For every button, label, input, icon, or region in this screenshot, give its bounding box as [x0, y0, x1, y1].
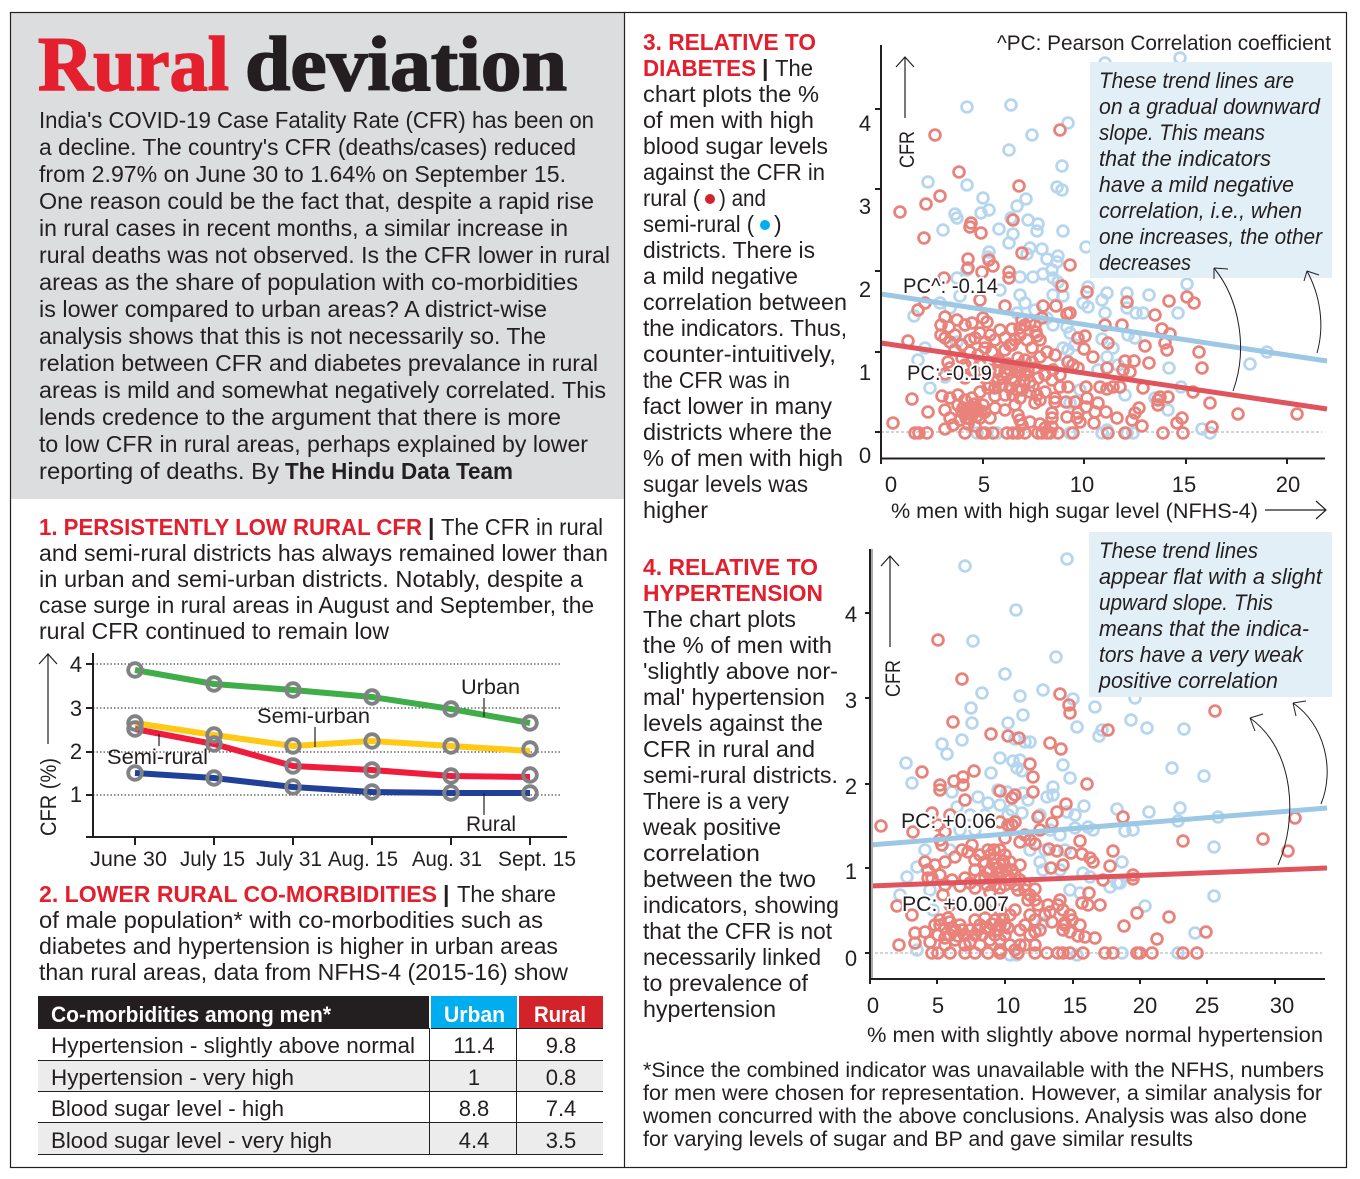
series: urban [135, 670, 530, 723]
y axis title with arrow [895, 57, 919, 168]
x axis tick labels: 15 [1172, 472, 1196, 497]
section 3 text: relative to diabetes [643, 29, 847, 523]
table: co-morbidities among men: 11.4 [453, 1033, 495, 1058]
section 2 text: lower rural co-morbidities [39, 881, 568, 985]
section 3 text: relative to diabetes: semi-rural ( [643, 211, 754, 237]
y axis tick labels: 4 [70, 652, 82, 677]
section 3 text: relative to diabetes: the CFR was in [643, 367, 790, 393]
x axis tick labels: 10 [996, 993, 1020, 1018]
correlation label: rural: PC: -0.19 [907, 361, 992, 385]
x axis labels: Aug. 31 [412, 847, 482, 871]
callout arrows [1250, 701, 1327, 865]
section 4 text: relative to hypertension: 'slightly above nor- [643, 658, 838, 684]
intro text block: areas is mild and somewhat negatively correlated. This [39, 377, 606, 403]
section 2 text: lower rural co-morbidities: of male population* with co-morbodities such as [39, 907, 543, 933]
data markers [128, 663, 537, 800]
section 2 text: lower rural co-morbidities: The share [457, 881, 556, 907]
x axis labels: July 15 [180, 847, 245, 871]
section 4 text: relative to hypertension: that the CFR is not [643, 918, 833, 944]
footnote: for men were chosen for representation. However, a similar analysis for [643, 1081, 1322, 1105]
intro text block: rural deaths was not observed. Is the CFR lower in rural [39, 242, 610, 268]
series labels with leaders: Urban [461, 675, 520, 699]
table: co-morbidities among men [38, 996, 603, 1154]
intro text block: India's COVID-19 Case Fatality Rate (CFR) has been on [39, 107, 594, 133]
section 4 text: relative to hypertension: correlation [643, 840, 760, 866]
y axis tick labels: 3 [70, 696, 82, 721]
series: rural [135, 773, 530, 793]
scatter chart: hypertension vs CFR [845, 532, 1332, 1047]
axes [875, 45, 1325, 464]
section 1 text: persistently low rural CFR: rural CFR continued to remain low [39, 618, 389, 644]
trend line: semi-rural [881, 294, 1327, 361]
scatter chart: diabetes vs CFR [859, 31, 1332, 523]
callout: flat slope [1089, 532, 1332, 697]
section 3 text: relative to diabetes: rural ( [643, 185, 700, 211]
y axis tick labels [70, 652, 82, 807]
y axis tick labels: 4 [845, 602, 857, 627]
y axis tick labels [845, 602, 857, 971]
x axis tick labels: 20 [1276, 472, 1300, 497]
x axis title: % men with slightly above normal hypertension [867, 1023, 1323, 1047]
section 4 text: relative to hypertension: to prevalence of [643, 970, 809, 996]
x axis tick labels: 0 [885, 472, 897, 497]
x axis tick labels [867, 993, 1294, 1018]
callout: downward slope [1090, 62, 1332, 278]
table: co-morbidities among men: Urban [444, 1002, 505, 1027]
footnote: Pearson correlation: ^PC: Pearson Correlation coefficient [997, 31, 1331, 55]
y axis title and arrow: CFR (%) [36, 758, 61, 836]
correlation label: semi-rural: PC: +0.06 [901, 809, 996, 833]
callout: downward slope: These trend lines are [1099, 68, 1294, 93]
callout: downward slope: correlation, i.e., when [1099, 198, 1302, 223]
table: co-morbidities among men: 3.5 [546, 1128, 576, 1153]
section 3 text: relative to diabetes: higher [643, 497, 708, 523]
section 4 text: relative to hypertension: 4. RELATIVE TO [643, 554, 818, 580]
table: co-morbidities among men: Blood sugar level - very high [51, 1128, 332, 1153]
section 1 text: persistently low rural CFR: The CFR in rural [441, 514, 603, 540]
intro text block: in rural cases in recent months, a similar increase in [39, 215, 568, 241]
section 3 text: relative to diabetes: fact lower in many [643, 393, 832, 419]
callout: flat slope: tors have a very weak [1099, 642, 1305, 667]
footnote: *Since the combined indicator was unavailable with the NFHS, numbers [643, 1058, 1324, 1082]
table: co-morbidities among men: 9.8 [546, 1033, 576, 1058]
section 3 text: relative to diabetes: ) [774, 211, 782, 237]
intro text block: reporting of deaths. By [39, 458, 280, 484]
callout: downward slope: slope. This means [1099, 120, 1265, 145]
section 2 text: lower rural co-morbidities: 2. LOWER RURAL CO-MORBIDITIES [39, 881, 437, 907]
y axis title with arrow: CFR [895, 131, 919, 168]
section 2 text: lower rural co-morbidities: | [443, 881, 449, 907]
y axis tick labels: 0 [845, 946, 857, 971]
line chart: CFR by district type [36, 652, 576, 871]
section 3 text: relative to diabetes: | [762, 55, 768, 81]
table: co-morbidities among men: Blood sugar level - high [51, 1096, 284, 1121]
x axis tick labels: 20 [1133, 993, 1157, 1018]
section 4 text: relative to hypertension: the % of men with [643, 632, 832, 658]
section 3 text: relative to diabetes: of men with high [643, 107, 814, 133]
x axis tick labels: 0 [867, 993, 879, 1018]
red points: rural districts [876, 635, 1300, 958]
table: co-morbidities among men: Co-morbidities among men* [51, 1002, 331, 1027]
callout: flat slope: appear flat with a slight [1099, 564, 1324, 589]
trend line: semi-rural [870, 808, 1327, 845]
series: semi-urban [135, 723, 530, 751]
section 4 text: relative to hypertension: semi-rural districts. [643, 762, 838, 788]
section 3 text: relative to diabetes: counter-intuitively, [643, 341, 836, 367]
y axis tick labels: 2 [845, 774, 857, 799]
blue points: semi-rural districts [909, 53, 1272, 438]
section 3 text: relative to diabetes: chart plots the % [643, 81, 819, 107]
section 4 text: relative to hypertension: between the two [643, 866, 816, 892]
section 1 text: persistently low rural CFR: case surge in rural areas in August and September, the [39, 592, 594, 618]
y axis tick labels: 0 [859, 443, 871, 468]
table: co-morbidities among men: 0.8 [546, 1065, 576, 1090]
section 3 text: relative to diabetes: ) and [719, 185, 766, 211]
table: co-morbidities among men: 7.4 [546, 1096, 576, 1121]
table: co-morbidities among men: 8.8 [459, 1096, 489, 1121]
intro text block: to low CFR in rural areas, perhaps explained by lower [39, 431, 588, 457]
callout: flat slope: These trend lines [1099, 538, 1258, 563]
x axis labels: Aug. 15 [328, 847, 398, 871]
section 3 text: relative to diabetes: 3. RELATIVE TO [643, 29, 816, 55]
callout arrows [1214, 268, 1321, 391]
footnote: women concurred with the above conclusions. Analysis was also done [642, 1104, 1307, 1128]
section 3 text: relative to diabetes: % of men with high [643, 445, 843, 471]
correlation label: semi-rural: PC^: -0.14 [903, 274, 998, 298]
x axis tick labels: 5 [932, 993, 944, 1018]
x axis tick labels: 15 [1063, 993, 1087, 1018]
trend line: rural [870, 868, 1327, 886]
series labels with leaders [107, 675, 520, 836]
section 4 text: relative to hypertension: levels against the [643, 710, 823, 736]
intro text block: The Hindu Data Team [285, 458, 513, 484]
section 3 text: relative to diabetes: a mild negative [643, 263, 798, 289]
intro text block: is lower compared to urban areas? A district-wise [39, 296, 547, 322]
series labels with leaders: Rural [466, 812, 516, 836]
section 2 text: lower rural co-morbidities: diabetes and hypertension is higher in urban areas [39, 933, 558, 959]
y axis tick labels: 2 [859, 277, 871, 302]
x axis tick labels: 25 [1195, 993, 1219, 1018]
x axis labels [90, 847, 576, 871]
panel: intro background [11, 13, 624, 499]
section 3 text: relative to diabetes: correlation between [643, 289, 847, 315]
y axis tick labels [859, 111, 871, 468]
section 3 text: relative to diabetes: against the CFR in [643, 159, 825, 185]
y axis tick labels: 1 [70, 782, 82, 807]
section 4 text: relative to hypertension: CFR in rural and [643, 736, 815, 762]
intro text block: a decline. The country's CFR (deaths/cases) reduced [39, 134, 576, 160]
callout: flat slope: positive correlation [1098, 668, 1278, 693]
callout: downward slope: decreases [1099, 250, 1191, 275]
section 3 text: relative to diabetes: sugar levels was [643, 471, 808, 497]
callout: downward slope: on a gradual downward [1099, 94, 1321, 119]
series labels with leaders: Semi-urban [257, 704, 370, 728]
section 3 text: relative to diabetes: DIABETES [643, 55, 756, 81]
y axis tick labels: 3 [859, 194, 871, 219]
section 3 text: relative to diabetes: the indicators. Thus, [643, 315, 847, 341]
intro text block: lends credence to the argument that there is more [39, 404, 561, 430]
table: co-morbidities among men: Hypertension - very high [51, 1065, 294, 1090]
footnote: for varying levels of sugar and BP and gave similar results [643, 1127, 1193, 1151]
title [38, 21, 567, 107]
x axis tick labels: 30 [1270, 993, 1294, 1018]
section 4 text: relative to hypertension: weak positive [642, 814, 781, 840]
callout: flat slope: upward slope. This [1099, 590, 1273, 615]
table: co-morbidities among men: Rural [534, 1002, 586, 1027]
section 1 text: persistently low rural CFR: and semi-rural districts has always remained lower than [39, 540, 608, 566]
section 1 text: persistently low rural CFR: 1. PERSISTENTLY LOW RURAL CFR [39, 514, 422, 540]
y axis tick labels: 3 [845, 688, 857, 713]
series: semi-rural [135, 729, 530, 777]
intro text block: relation between CFR and diabetes prevalance in rural [39, 350, 598, 376]
y axis tick labels: 1 [845, 859, 857, 884]
section 4 text: relative to hypertension: hypertension [643, 996, 776, 1022]
title: deviation [245, 21, 567, 107]
title: Rural [38, 21, 229, 107]
section 1 text: persistently low rural CFR: | [428, 514, 434, 540]
section 3 text: relative to diabetes: The [775, 55, 813, 81]
y axis tick labels: 4 [859, 111, 871, 136]
section 4 text: relative to hypertension: mal' hypertension [643, 684, 825, 710]
callout: downward slope: have a mild negative [1099, 172, 1294, 197]
series labels with leaders: Semi-rural [107, 745, 208, 769]
table: co-morbidities among men: 1 [468, 1065, 480, 1090]
footnote [642, 1058, 1324, 1151]
section 3 text: relative to diabetes: districts where the [643, 419, 832, 445]
trend line: rural [881, 343, 1327, 409]
x axis title with arrow: % men with high sugar level (NFHS-4) [891, 499, 1258, 523]
section 3 text: relative to diabetes: blood sugar levels [643, 133, 828, 159]
section 4 text: relative to hypertension: The chart plots [643, 606, 796, 632]
callout: downward slope: one increases, the other [1099, 224, 1323, 249]
blue points: semi-rural districts [895, 554, 1223, 960]
intro text block: from 2.97% on June 30 to 1.64% on September 15. [39, 161, 566, 187]
axes [865, 549, 1325, 984]
callout: downward slope: that the indicators [1099, 146, 1271, 171]
intro text block: One reason could be the fact that, despite a rapid rise [39, 188, 594, 214]
x axis labels: July 31 [256, 847, 322, 871]
section 3 text: relative to diabetes: districts. There is [643, 237, 815, 263]
table: co-morbidities among men: 4.4 [459, 1128, 489, 1153]
x axis tick labels [885, 472, 1300, 497]
x axis labels: June 30 [90, 847, 167, 871]
intro text block: analysis shows that this is not necessarily so. The [39, 323, 546, 349]
y axis tick labels: 2 [70, 739, 82, 764]
intro text block: areas as the share of population with co-morbidities [39, 269, 578, 295]
section 4 text: relative to hypertension: indicators, showing [643, 892, 839, 918]
section 4 text: relative to hypertension: HYPERTENSION [643, 580, 823, 606]
section 4 text: relative to hypertension: necessarily linked [643, 944, 821, 970]
correlation label: rural: PC: +0.007 [902, 892, 1009, 916]
callout: flat slope: means that the indica- [1099, 616, 1309, 641]
section 2 text: lower rural co-morbidities: than rural areas, data from NFHS-4 (2015-16) show [39, 959, 568, 985]
y axis title with arrow: CFR [881, 660, 905, 697]
x axis labels: Sept. 15 [498, 847, 576, 871]
intro text block [39, 107, 610, 484]
section 1 text: persistently low rural CFR [39, 514, 608, 644]
section 4 text: relative to hypertension: There is a very [643, 788, 789, 814]
red points: rural districts [888, 125, 1302, 438]
x axis tick labels: 5 [978, 472, 990, 497]
x axis tick labels: 10 [1070, 472, 1094, 497]
y axis tick labels: 1 [859, 360, 871, 385]
section 1 text: persistently low rural CFR: in urban and semi-urban districts. Notably, despite a [39, 566, 583, 592]
y axis title and arrow [36, 654, 61, 836]
section 4 text: relative to hypertension [642, 554, 839, 1022]
table: co-morbidities among men: Hypertension - slightly above normal [51, 1033, 415, 1058]
y axis title with arrow [881, 556, 905, 697]
